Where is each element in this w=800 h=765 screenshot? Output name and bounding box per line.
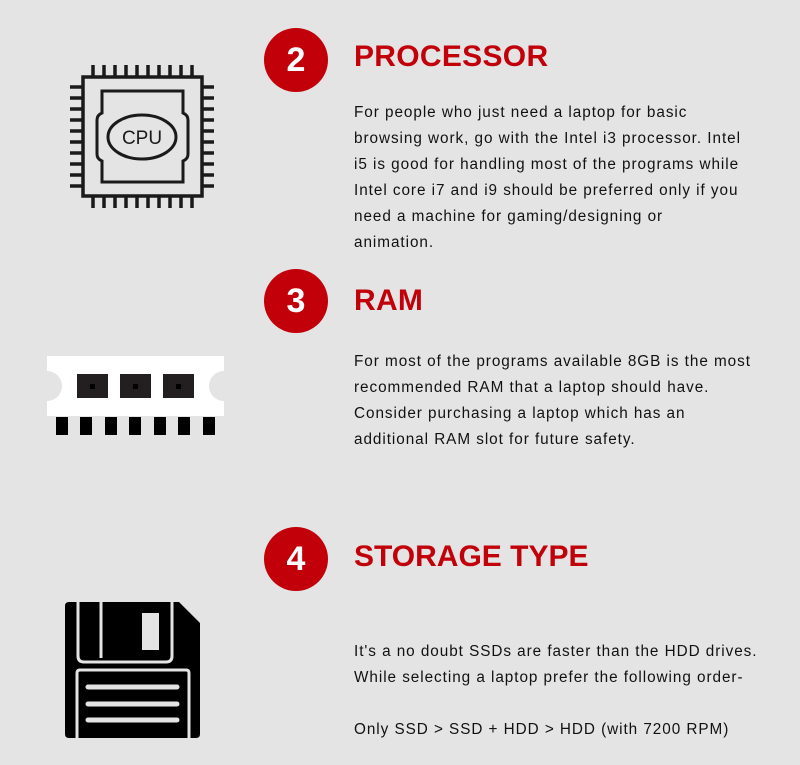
icon: cpu: CPU xyxy=(122,128,162,149)
text: storage: While selecting a laptop prefer the following order- xyxy=(354,669,744,686)
heading: processor: PROCESSOR xyxy=(354,40,548,73)
badge 3: 3 xyxy=(287,282,305,320)
text: ram xyxy=(354,353,751,448)
text: processor: Intel core i7 and i9 should be preferred only if you xyxy=(354,182,738,199)
text: storage xyxy=(354,643,757,738)
text: ram: additional RAM slot for future safety. xyxy=(354,431,636,448)
text: ram: For most of the programs available 8GB is the most xyxy=(354,353,751,370)
badge 4: 4 xyxy=(287,540,305,578)
text: processor: For people who just need a laptop for basic xyxy=(354,104,687,121)
text: ram: Consider purchasing a laptop which has an xyxy=(354,405,685,422)
icon: ram xyxy=(32,356,239,435)
badge 4 xyxy=(264,527,328,591)
text: processor xyxy=(354,104,741,251)
badge 2: 2 xyxy=(287,41,305,79)
heading: ram: RAM xyxy=(354,284,423,317)
icon: cpu xyxy=(70,65,214,208)
text: storage: It's a no doubt SSDs are faster than the HDD drives. xyxy=(354,643,757,660)
badge 3 xyxy=(264,269,328,333)
heading: storage type: STORAGE TYPE xyxy=(354,540,588,573)
text: ram: recommended RAM that a laptop should have. xyxy=(354,379,709,396)
text: processor: need a machine for gaming/designing or xyxy=(354,208,663,225)
text: processor: animation. xyxy=(354,234,434,251)
text: processor: i5 is good for handling most of the programs while xyxy=(354,156,739,173)
text: processor: browsing work, go with the Intel i3 processor. Intel xyxy=(354,130,741,147)
badge 2 xyxy=(264,28,328,92)
text: storage: Only SSD > SSD + HDD > HDD (with 7200 RPM) xyxy=(354,721,729,738)
icon: floppy xyxy=(65,602,200,738)
